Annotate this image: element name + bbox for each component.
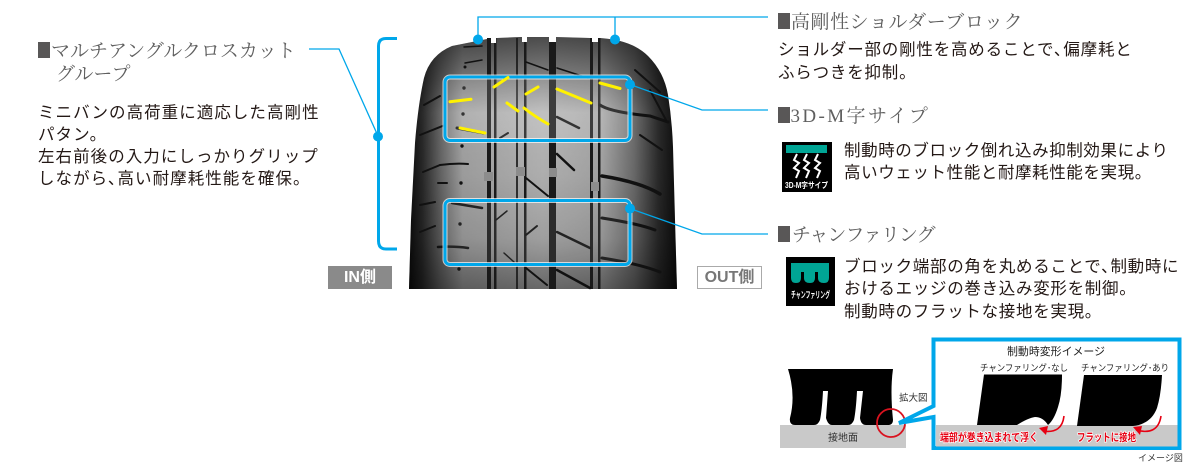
leader: shoulder blocks bbox=[473, 17, 768, 44]
red arrows bbox=[1043, 416, 1161, 431]
icon: 3D-M sipe bbox=[782, 142, 832, 192]
enlarged view panel bbox=[899, 340, 1180, 448]
yellow sipe marks bbox=[450, 78, 620, 133]
block without chamfer bbox=[977, 374, 1062, 425]
text: chamfering description: おけるエッジの巻き込み変形を制御。 bbox=[844, 280, 1136, 298]
enlarged view panel: 制動時変形イメージ bbox=[1007, 344, 1105, 358]
enlarged view panel: フラットに接地 bbox=[1077, 430, 1136, 444]
ground and tread block: 拡大図 bbox=[899, 392, 928, 404]
text: multi-angle description: パタン。 bbox=[38, 126, 107, 144]
text: multi-angle description: ミニバンの高荷重に適応した高剛性 bbox=[38, 104, 320, 122]
icon: chamfering bbox=[786, 257, 835, 306]
text: shoulder description: ショルダー部の剛性を高めることで､偏摩耗と bbox=[778, 41, 1133, 59]
text: chamfering description: ブロック端部の角を丸めることで､制動時に bbox=[844, 258, 1179, 276]
tag: IN side: IN側 bbox=[344, 269, 376, 286]
enlarged view panel: 端部が巻き込まれて浮く bbox=[940, 430, 1038, 444]
tag: OUT side: OUT側 bbox=[705, 269, 754, 286]
heading: chamfering: チャンファリング bbox=[792, 225, 935, 246]
heading: multi-angle cross-cut groove: マルチアングルクロスカット bbox=[51, 41, 296, 62]
heading second line: グループ bbox=[56, 64, 130, 85]
enlarged view panel: チャンファリング･なし bbox=[980, 362, 1068, 373]
text: shoulder description bbox=[778, 40, 1133, 82]
text: 3D-M sipe description: 制動時のブロック倒れ込み抑制効果により bbox=[844, 142, 1169, 160]
text: multi-angle description: 左右前後の入力にしっかりグリップ bbox=[38, 148, 319, 166]
bracket and leader: multi-angle cross-cut groove bbox=[309, 38, 397, 249]
leader: chamfering bbox=[630, 208, 768, 234]
sipes bbox=[420, 46, 668, 288]
block with chamfer bbox=[1077, 375, 1162, 426]
tag: IN side bbox=[328, 266, 392, 289]
ground and tread block: 接地面 bbox=[828, 431, 858, 444]
heading: shoulder block: 高剛性ショルダーブロック bbox=[791, 12, 1023, 33]
grooves bbox=[487, 38, 600, 289]
text: multi-angle description bbox=[38, 104, 320, 188]
text: multi-angle description: しながら､高い耐摩耗性能を確保。 bbox=[38, 170, 311, 188]
tag: OUT side bbox=[697, 266, 762, 289]
text: 3D-M sipe description bbox=[844, 142, 1169, 182]
text: shoulder description: ふらつきを抑制。 bbox=[778, 64, 916, 82]
leader: 3D-M sipe bbox=[630, 84, 768, 110]
groove notches at tread edge bbox=[491, 34, 598, 43]
text: 3D-M sipe description: 高いウェット性能と耐摩耗性能を実現。 bbox=[844, 164, 1152, 182]
text: chamfering description bbox=[844, 258, 1179, 320]
ground and tread block bbox=[780, 369, 928, 448]
text: chamfering description: 制動時のフラットな接地を実現。 bbox=[844, 302, 1102, 320]
highlight box: chamfering zone bbox=[445, 200, 635, 264]
note: image only: イメージ図 bbox=[1138, 453, 1183, 463]
enlarged view panel: チャンファリング･あり bbox=[1081, 362, 1169, 373]
heading: 3D-M sipe: 3D-M字サイプ bbox=[790, 106, 930, 127]
highlight box: 3D-M sipe zone bbox=[445, 77, 635, 140]
